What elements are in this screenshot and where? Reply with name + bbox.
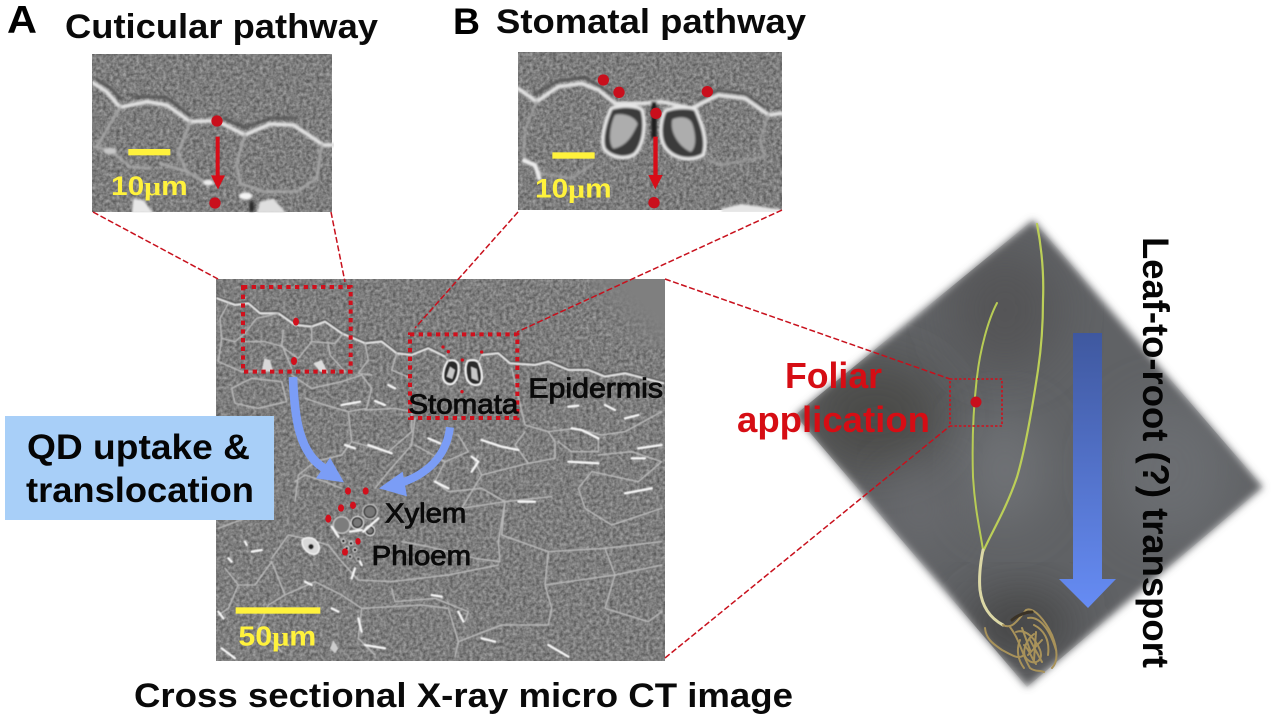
callout: QD uptake and translocation: QD uptake &: [27, 428, 250, 467]
panel: cuticular pathway micrograph: [92, 54, 334, 213]
scale bar 10 micrometre: 10μm: [535, 174, 612, 204]
scale bar 50 micrometre: 50μm: [238, 621, 316, 652]
scale bar 10 micrometre: 10μm: [111, 171, 188, 201]
arrow: cuticular route to vascular bundle: [293, 377, 344, 482]
red dots and downward arrow: [209, 115, 225, 209]
red dotted selection box: stomatal: [410, 334, 517, 418]
callout: QD uptake and translocation: [5, 416, 274, 520]
plant: leaves and stem: [973, 224, 1043, 625]
scale bar 10 micrometre: [111, 149, 188, 201]
label: phloem: Phloem: [372, 540, 471, 571]
scale bar 50 micrometre: [236, 607, 320, 652]
mesophyll cell walls: [218, 303, 662, 657]
label: leaf-to-root transport: Leaf-to-root (?) transport: [1135, 237, 1176, 668]
heading: cuticular pathway: Cuticular pathway: [65, 8, 378, 46]
label: xylem: Xylem: [385, 497, 466, 528]
caption: cross sectional X-ray micro CT image: Cross sectional X-ray micro CT image: [134, 677, 793, 715]
label: foliar application: [737, 355, 930, 440]
application site marker on leaf: [950, 379, 1002, 426]
panel: stomatal pathway micrograph: [518, 52, 782, 213]
label: foliar application: application: [737, 399, 930, 440]
vascular bundle: [302, 504, 378, 578]
heading: stomatal pathway: Stomatal pathway: [496, 3, 806, 41]
bright wall fragments: [218, 385, 662, 658]
label: foliar application: Foliar: [785, 355, 882, 396]
panel: cross sectional CT image: [216, 279, 665, 661]
stomata guard cells: [443, 355, 482, 385]
red dots and downward arrow: [598, 74, 713, 208]
label: stomata: Stomata: [408, 388, 519, 419]
panel: plant photograph on dark background: [795, 220, 1263, 687]
connector lines from CT image to insets and plant: [93, 210, 950, 658]
plant: roots: [985, 609, 1056, 672]
red dotted selection box: cuticular: [243, 287, 351, 372]
small red dots on CT image: [291, 318, 483, 556]
callout: QD uptake and translocation: translocation: [26, 471, 254, 510]
epidermis cell walls: [217, 296, 663, 383]
label: epidermis: Epidermis: [528, 373, 663, 404]
arrow: leaf to root transport: [1059, 333, 1116, 608]
panel label B: B: [453, 1, 480, 42]
panel label A: A: [7, 0, 37, 42]
arrow: stomatal route to vascular bundle: [379, 427, 450, 496]
scale bar 10 micrometre: [535, 152, 612, 204]
